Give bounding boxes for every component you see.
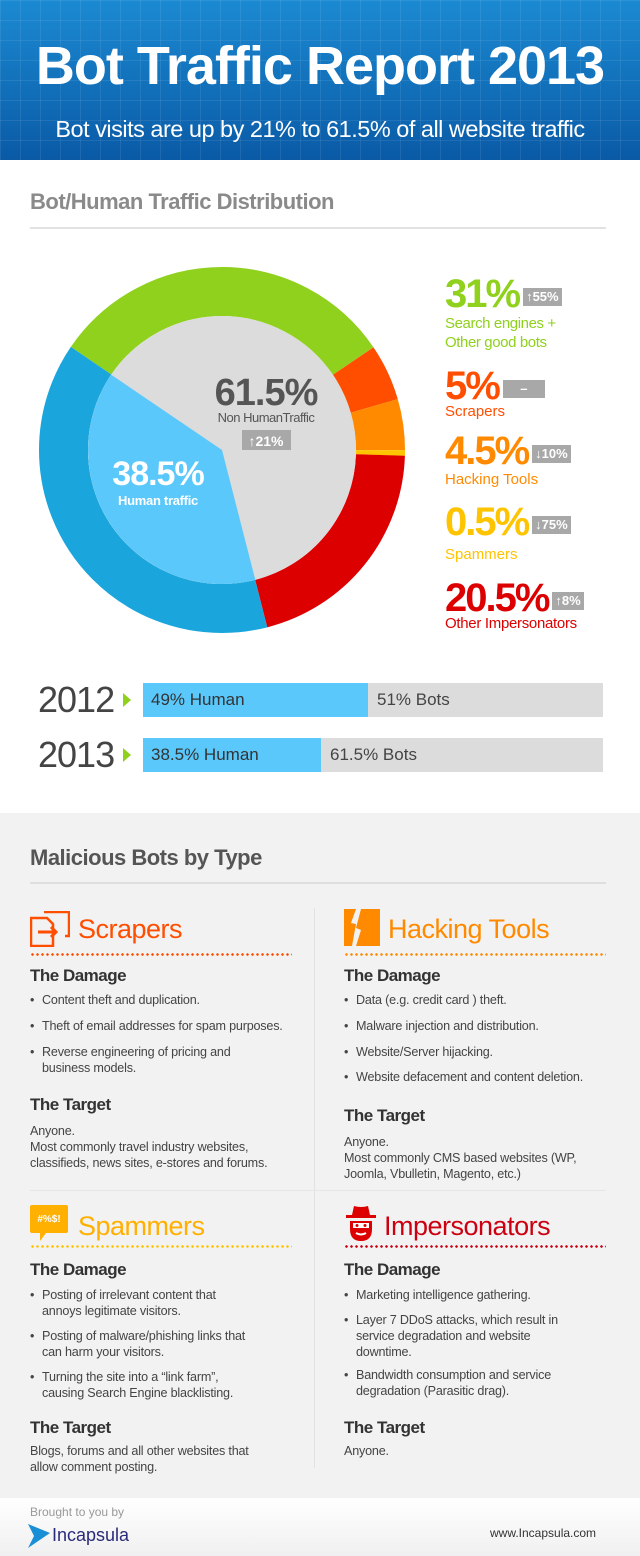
icon: masked face with hat xyxy=(346,1206,376,1241)
bar: 2013 xyxy=(38,734,603,775)
bar: 2012: 49% Human xyxy=(151,690,245,709)
card: spammers: Posting of malware/phishing links that xyxy=(42,1329,245,1343)
panel: malicious bots xyxy=(0,813,640,1498)
card: spammers: Blogs, forums and all other websites that xyxy=(30,1444,249,1458)
section heading: distribution: Bot/Human Traffic Distribution xyxy=(30,189,334,214)
subtitle: Bot visits are up by 21% to 61.5% of all website traffic xyxy=(55,116,585,142)
card: scrapers: Content theft and duplication. xyxy=(42,993,200,1007)
heading: scrapers: Scrapers xyxy=(78,914,182,944)
legend: scrapers: – xyxy=(520,381,527,396)
icon: speech bubble xyxy=(30,1205,68,1241)
bar: 2012 xyxy=(38,679,603,720)
card: spammers: The Target xyxy=(30,1418,111,1437)
heading: hacking tools: Hacking Tools xyxy=(388,914,549,944)
logo: incapsula xyxy=(28,1524,129,1548)
legend: Scrapers xyxy=(445,403,505,420)
card: spammers: allow comment posting. xyxy=(30,1460,157,1474)
donut chart: 61.5% xyxy=(215,372,318,414)
donut chart: Human traffic xyxy=(118,493,198,508)
card: impersonators: Marketing intelligence gathering. xyxy=(356,1288,531,1302)
url: www.Incapsula.com xyxy=(490,1526,596,1540)
card: impersonators: The Damage xyxy=(344,1260,440,1279)
legend: impersonators: ↑8% xyxy=(555,593,581,608)
legend: Spammers xyxy=(445,546,518,563)
card: hacking tools xyxy=(344,909,606,1181)
card: spammers xyxy=(30,1205,292,1474)
card: impersonators: Bandwidth consumption and service xyxy=(356,1368,551,1382)
legend: good bots xyxy=(445,272,562,316)
card: spammers: Turning the site into a “link farm”, xyxy=(42,1370,218,1384)
bar: 2012: 2012 xyxy=(38,679,114,720)
bar: 2013: 61.5% Bots xyxy=(330,745,417,764)
legend: Search engines + xyxy=(445,315,556,332)
legend: spammers: 0.5% xyxy=(445,500,528,544)
legend: impersonators: 20.5% xyxy=(445,576,548,620)
legend: good bots: ↑55% xyxy=(526,289,559,304)
title: Bot Traffic Report 2013 xyxy=(36,36,604,96)
bar: 2012: 51% Bots xyxy=(377,690,450,709)
card: scrapers: The Damage xyxy=(30,966,126,985)
card: hacking tools: Most commonly CMS based websites (WP, xyxy=(344,1151,576,1165)
card: spammers: can harm your visitors. xyxy=(42,1345,164,1359)
card: scrapers: The Target xyxy=(30,1095,111,1114)
card: hacking tools: Website/Server hijacking. xyxy=(356,1045,493,1059)
card: scrapers: Most commonly travel industry websites, xyxy=(30,1140,248,1154)
card: hacking tools: Data (e.g. credit card ) theft. xyxy=(356,993,507,1007)
card: impersonators: Layer 7 DDoS attacks, which result in xyxy=(356,1313,558,1327)
icon: speech bubble: #%$! xyxy=(37,1214,61,1225)
card: scrapers: classifieds, news sites, e-stores and forums. xyxy=(30,1156,267,1170)
legend xyxy=(445,272,584,632)
card: spammers: The Damage xyxy=(30,1260,126,1279)
legend: Other Impersonators xyxy=(445,615,577,632)
legend: hacking tools: 4.5% xyxy=(445,429,528,473)
bar: 2013: 38.5% Human xyxy=(151,745,259,764)
card: hacking tools: The Target xyxy=(344,1106,425,1125)
card: spammers: Posting of irrelevant content that xyxy=(42,1288,216,1302)
header banner xyxy=(0,0,640,160)
card: scrapers: Anyone. xyxy=(30,1124,75,1138)
card: hacking tools: Joomla, Vbulletin, Magento, etc.) xyxy=(344,1167,521,1181)
donut chart: 38.5% xyxy=(112,455,204,493)
legend: hacking tools: ↓10% xyxy=(535,446,568,461)
card: scrapers: Theft of email addresses for spam purposes. xyxy=(42,1019,283,1033)
card: hacking tools: Malware injection and distribution. xyxy=(356,1019,539,1033)
donut chart xyxy=(39,267,405,633)
card: impersonators: Anyone. xyxy=(344,1444,389,1458)
footer xyxy=(0,1498,640,1556)
footer: Brought to you by xyxy=(30,1505,124,1519)
legend: spammers xyxy=(445,500,571,544)
heading: impersonators: Impersonators xyxy=(384,1211,550,1241)
card: spammers: causing Search Engine blacklisting. xyxy=(42,1386,233,1400)
donut chart: Non HumanTraffic xyxy=(218,410,315,425)
card: impersonators xyxy=(344,1206,606,1458)
icon: scraper documents xyxy=(30,911,70,947)
legend: hacking tools xyxy=(445,429,571,473)
card: impersonators: service degradation and website xyxy=(356,1329,530,1343)
card: impersonators: degradation (Parasitic drag). xyxy=(356,1384,509,1398)
card: scrapers: business models. xyxy=(42,1061,136,1075)
legend: Hacking Tools xyxy=(445,471,538,488)
donut chart: ↑21% xyxy=(248,433,284,449)
card: hacking tools: The Damage xyxy=(344,966,440,985)
card: scrapers xyxy=(30,911,292,1170)
card: impersonators: downtime. xyxy=(356,1345,412,1359)
legend: good bots: 31% xyxy=(445,272,519,316)
card: hacking tools: Anyone. xyxy=(344,1135,389,1149)
icon: broken lock xyxy=(344,909,380,946)
card: spammers: annoys legitimate visitors. xyxy=(42,1304,181,1318)
card: hacking tools: Website defacement and content deletion. xyxy=(356,1070,583,1084)
legend: Other good bots xyxy=(445,334,547,351)
heading: spammers: Spammers xyxy=(78,1211,205,1241)
card: scrapers: Reverse engineering of pricing and xyxy=(42,1045,231,1059)
logo: incapsula: Incapsula xyxy=(52,1525,129,1545)
card: impersonators: The Target xyxy=(344,1418,425,1437)
section heading: malicious: Malicious Bots by Type xyxy=(30,845,262,870)
legend: spammers: ↓75% xyxy=(535,517,568,532)
bar: 2013: 2013 xyxy=(38,734,114,775)
legend: scrapers xyxy=(445,364,545,408)
legend: scrapers: 5% xyxy=(445,364,499,408)
